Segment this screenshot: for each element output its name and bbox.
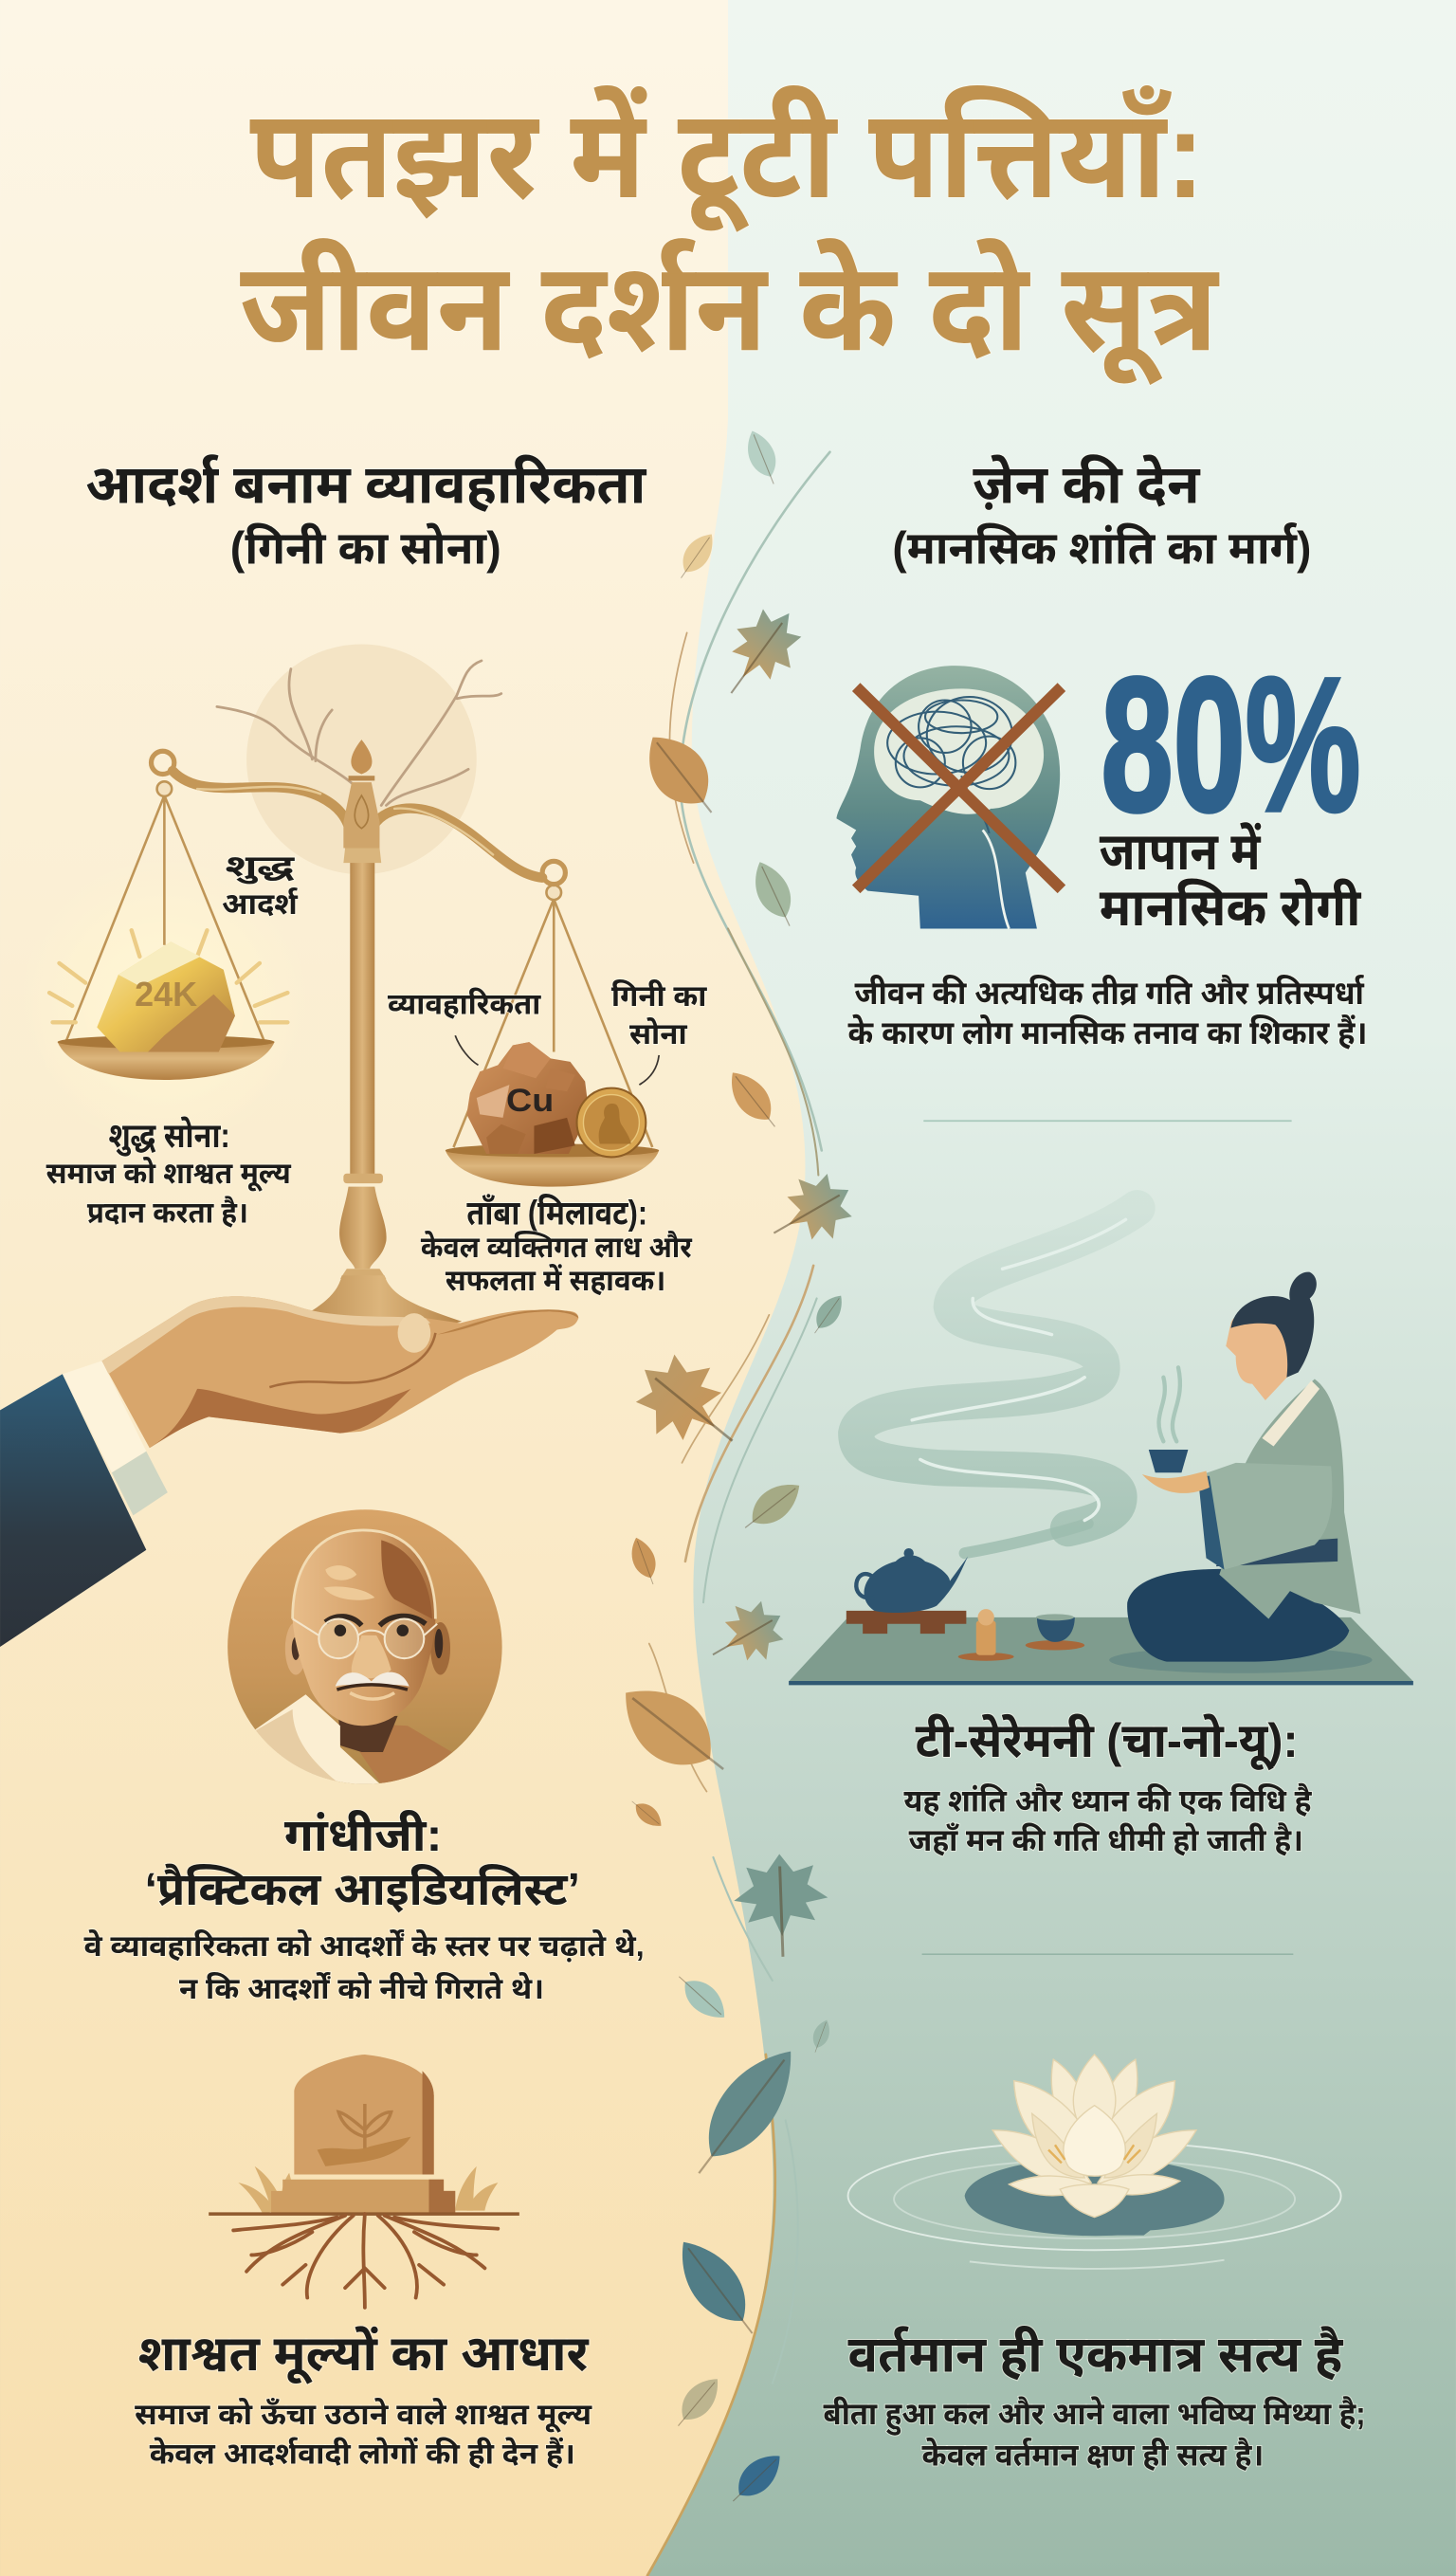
text: Gandhi practical idealist: गांधीजी: bbox=[284, 1810, 442, 1861]
left chains bbox=[65, 781, 264, 1042]
heading: left column: आदर्श बनाम व्यावहारिकता bbox=[85, 453, 646, 515]
moustache bbox=[336, 1672, 410, 1687]
icon: sun disc with bare branches bbox=[217, 645, 501, 874]
shawl bbox=[256, 1694, 379, 1784]
label: शुद्ध आदर्श: आदर्श bbox=[222, 887, 299, 921]
mouth bbox=[337, 1685, 408, 1690]
heading: left column: (गिनी का सोना) bbox=[230, 523, 501, 575]
forehead highlights bbox=[324, 1565, 374, 1600]
icon: teapot on tray bbox=[846, 1548, 968, 1634]
title: जीवन दर्शन के दो सूत्र bbox=[240, 237, 1220, 385]
neck shadow bbox=[338, 1716, 398, 1752]
text: copper: केवल व्यक्तिगत लाध और bbox=[421, 1230, 693, 1264]
glasses bbox=[293, 1619, 437, 1658]
hair bbox=[1230, 1272, 1317, 1378]
icon: copper nugget: Cu bbox=[506, 1083, 554, 1119]
text: pure gold: प्रदान करता है। bbox=[87, 1196, 248, 1230]
chest bbox=[360, 1726, 451, 1783]
text: tea ceremony: जहाँ मन की गति धीमी हो जाती है। bbox=[909, 1821, 1303, 1857]
stat label: जापान में bbox=[1100, 822, 1262, 881]
icon: suit sleeve and cuff bbox=[0, 1361, 168, 1647]
text: copper: ताँबा (मिलावट): bbox=[466, 1192, 647, 1232]
text: tea ceremony: टी-सेरेमनी (चा-नो-यू): bbox=[916, 1713, 1299, 1771]
icon: head with tangled thoughts crossed out bbox=[836, 666, 1062, 928]
icon: tea cup on saucer bbox=[1026, 1614, 1084, 1650]
label: गिनी का सोना: गिनी का bbox=[611, 978, 707, 1013]
right chains bbox=[453, 886, 652, 1147]
text: copper bbox=[421, 1192, 693, 1297]
cup steam bbox=[1159, 1367, 1180, 1441]
text: pure gold bbox=[46, 1116, 292, 1230]
label: गिनी का सोना: सोना bbox=[629, 1016, 687, 1050]
column bbox=[339, 740, 387, 1279]
left pan bbox=[58, 1035, 275, 1080]
text: pure gold: समाज को शाश्वत मूल्य bbox=[46, 1156, 292, 1192]
balance scale bbox=[49, 740, 659, 1328]
icon: lotus on lily pad bbox=[965, 2055, 1225, 2236]
text: present is the only truth: वर्तमान ही एकमात्र सत्य है bbox=[848, 2326, 1344, 2384]
text: present is the only truth bbox=[824, 2326, 1366, 2472]
icon: 24K gold nugget: 24K bbox=[135, 975, 197, 1014]
heading: right column bbox=[892, 453, 1311, 575]
title bbox=[240, 84, 1220, 385]
heading: right column: ज़ेन की देन bbox=[973, 453, 1201, 515]
stat label bbox=[1100, 822, 1362, 937]
heading: left column bbox=[85, 453, 646, 575]
icon: candle on saucer bbox=[958, 1609, 1014, 1661]
head bbox=[293, 1530, 435, 1726]
text: Gandhi practical idealist: वे व्यावहारिकता को आदर्शों के स्तर पर चढ़ाते थे, bbox=[83, 1928, 645, 1963]
nose bbox=[352, 1635, 391, 1678]
text: Gandhi practical idealist bbox=[83, 1810, 645, 2005]
icon: guinea coin bbox=[577, 1088, 646, 1157]
icon: open hand holding the scale bbox=[102, 1296, 578, 1448]
stat label: मानसिक रोगी bbox=[1100, 878, 1362, 937]
text: Gandhi practical idealist: ‘प्रैक्टिकल आइडियलिस्ट’ bbox=[145, 1863, 580, 1915]
kimono body bbox=[1219, 1379, 1360, 1619]
text: tea ceremony bbox=[903, 1713, 1313, 1857]
icon: 24K gold nugget bbox=[97, 941, 235, 1051]
eyebrows bbox=[325, 1616, 426, 1625]
icon: water ripples bbox=[848, 2142, 1341, 2269]
text: eternal values: शाश्वत मूल्यों का आधार bbox=[138, 2326, 590, 2384]
icon: foundation stone with roots bbox=[209, 2055, 519, 2308]
icon: steam swirl bbox=[856, 1208, 1138, 1553]
label: गिनी का सोना bbox=[611, 978, 707, 1085]
cup bbox=[1149, 1450, 1188, 1472]
heading: right column: (मानसिक शांति का मार्ग) bbox=[892, 522, 1311, 575]
title: पतझर में टूटी पत्तियाँ: bbox=[250, 84, 1205, 232]
obi bbox=[1216, 1539, 1338, 1566]
shadow under seated figure bbox=[1109, 1647, 1373, 1673]
label: शुद्ध आदर्श bbox=[222, 850, 299, 921]
text: stress explanation: जीवन की अत्यधिक तीव्र गति और प्रतिस्पर्धा bbox=[854, 974, 1365, 1012]
rays around pure gold bbox=[49, 930, 287, 1022]
figure: seated woman holding tea bbox=[1127, 1272, 1360, 1662]
ears bbox=[285, 1622, 306, 1674]
label: व्यावहारिकता bbox=[387, 987, 541, 1065]
beam bbox=[152, 751, 565, 885]
hand bbox=[1142, 1471, 1210, 1493]
text: tea ceremony: यह शांति और ध्यान की एक विधि है bbox=[903, 1781, 1313, 1818]
text: eternal values bbox=[135, 2326, 592, 2471]
arm sleeve bbox=[1198, 1463, 1332, 1570]
glow behind pure gold bbox=[20, 858, 309, 1147]
icon: tea mat bbox=[789, 1617, 1413, 1681]
label: शुद्ध आदर्श: शुद्ध bbox=[226, 850, 296, 885]
decorative wind lines along the divide bbox=[647, 452, 829, 2575]
text: present is the only truth: केवल वर्तमान क्षण ही सत्य है। bbox=[922, 2436, 1264, 2472]
text: stress explanation: के कारण लोग मानसिक तनाव का शिकार हैं। bbox=[848, 1014, 1367, 1051]
text: copper: सफलता में सहावक। bbox=[446, 1264, 665, 1297]
label: व्यावहारिकता: व्यावहारिकता bbox=[387, 987, 541, 1021]
collar bbox=[1262, 1380, 1320, 1447]
text: Gandhi practical idealist: न कि आदर्शों को नीचे गिराते थे। bbox=[179, 1971, 544, 2005]
legs bbox=[1127, 1569, 1349, 1662]
text: eternal values: केवल आदर्शवादी लोगों की ही देन हैं। bbox=[150, 2437, 575, 2471]
text: eternal values: समाज को ऊँचा उठाने वाले शाश्वत मूल्य bbox=[135, 2396, 592, 2433]
right pan bbox=[446, 1144, 659, 1187]
falling leaves bbox=[606, 427, 865, 2512]
text: stress explanation bbox=[848, 974, 1367, 1051]
face and neck bbox=[1226, 1309, 1292, 1400]
stand base bbox=[298, 1275, 462, 1328]
icon: copper nugget bbox=[466, 1042, 589, 1154]
portrait: Gandhi bbox=[228, 1509, 502, 1789]
text: pure gold: शुद्ध सोना: bbox=[108, 1116, 230, 1157]
text: present is the only truth: बीता हुआ कल और आने वाला भविष्य मिथ्या है; bbox=[824, 2395, 1366, 2436]
